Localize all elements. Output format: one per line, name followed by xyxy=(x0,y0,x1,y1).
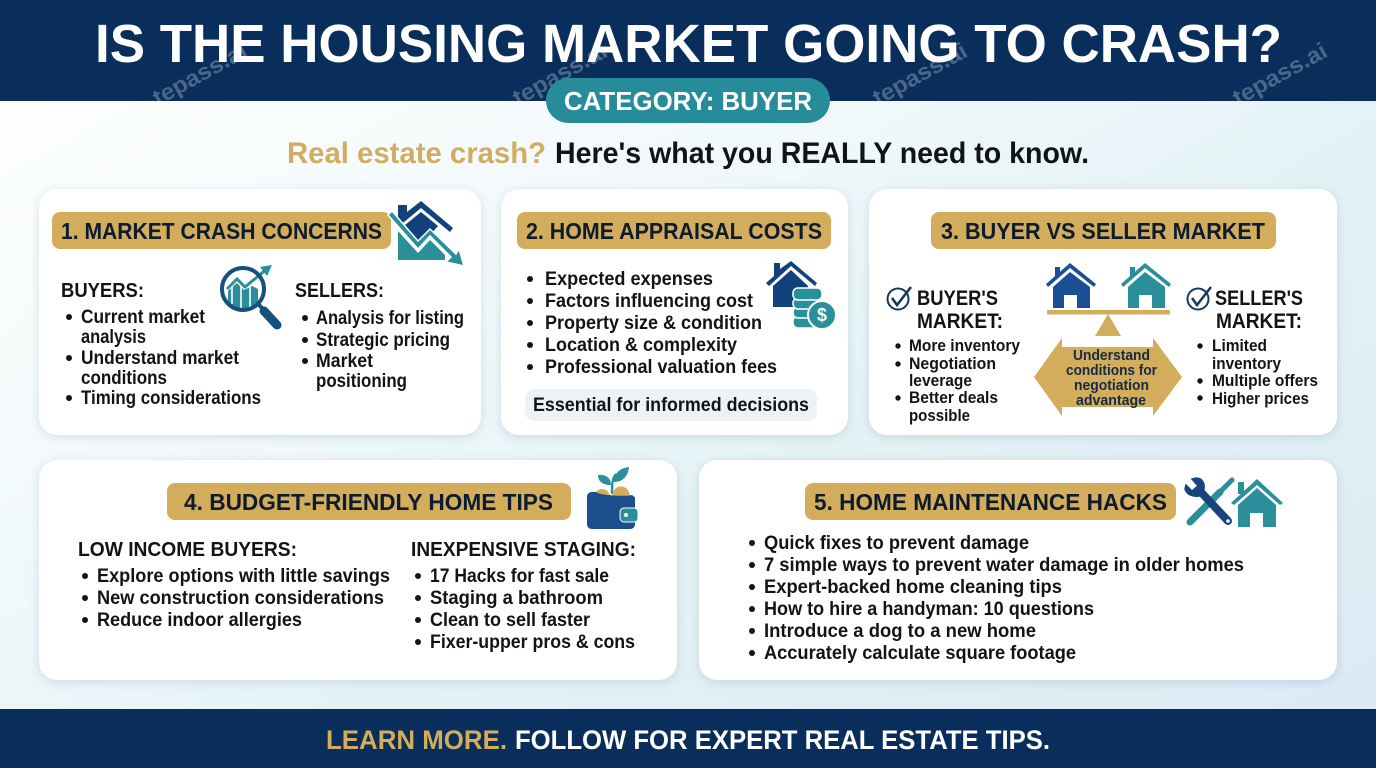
buyers list: BUYERS: xyxy=(61,280,144,302)
panel: home appraisal costs xyxy=(501,189,848,435)
callout: double arrow negotiation advantage: Understand xyxy=(1073,348,1150,364)
heading: home appraisal costs: 2. HOME APPRAISAL COSTS xyxy=(526,218,822,244)
appraisal list: Factors influencing cost xyxy=(545,291,754,312)
buyer's market list: MARKET: xyxy=(917,310,1003,333)
watermark xyxy=(152,42,1328,101)
buyer's market list: Better deals xyxy=(909,388,998,407)
callout: essential for informed decisions: Essential for informed decisions xyxy=(533,395,809,416)
appraisal list: Professional valuation fees xyxy=(545,357,777,378)
sellers list: SELLERS: xyxy=(295,280,384,302)
sellers list: Strategic pricing xyxy=(316,330,450,351)
subtitle xyxy=(287,137,1089,170)
icon: house with coins: $ xyxy=(817,305,827,325)
heading: home appraisal costs xyxy=(517,212,831,249)
inexpensive staging list: Clean to sell faster xyxy=(430,610,591,631)
inexpensive staging list: Fixer-upper pros & cons xyxy=(430,632,635,653)
low income buyers list: Reduce indoor allergies xyxy=(97,610,302,631)
heading: budget-friendly home tips: 4. BUDGET-FRIENDLY HOME TIPS xyxy=(184,489,553,515)
callout: double arrow negotiation advantage: advantage xyxy=(1076,393,1146,409)
sellers list: positioning xyxy=(316,371,407,392)
heading: budget-friendly home tips xyxy=(167,483,571,520)
icon: balance scale with two houses xyxy=(1046,263,1171,336)
heading: market crash concerns xyxy=(52,212,391,249)
heading: buyer vs seller market: 3. BUYER VS SELLER MARKET xyxy=(941,218,1266,244)
watermark: tepass.ai xyxy=(868,37,971,110)
heading: home maintenance hacks xyxy=(805,483,1176,520)
panel: budget-friendly home tips xyxy=(39,460,677,680)
panel: home maintenance hacks xyxy=(699,460,1337,680)
buyers list: Understand market xyxy=(81,348,240,369)
buyer's market list: More inventory xyxy=(909,336,1020,355)
heading: buyer vs seller market xyxy=(931,212,1276,249)
buyer's market list: Negotiation xyxy=(909,354,996,373)
watermark: tepass.ai xyxy=(148,37,251,110)
icon: tools and house xyxy=(1185,478,1283,527)
buyer's market list: leverage xyxy=(909,371,972,390)
low income buyers list: LOW INCOME BUYERS: xyxy=(78,539,297,561)
maintenance list xyxy=(749,533,1244,664)
buyers list: Timing considerations xyxy=(81,388,261,409)
appraisal list: Location & complexity xyxy=(545,335,737,356)
seller's market list: Multiple offers xyxy=(1212,371,1318,390)
maintenance list: Quick fixes to prevent damage xyxy=(764,533,1029,554)
callout: double arrow negotiation advantage xyxy=(1034,338,1182,416)
footer banner xyxy=(0,709,1376,768)
icon: house with coins xyxy=(766,261,836,329)
maintenance list: Accurately calculate square footage xyxy=(764,643,1076,664)
heading: home maintenance hacks: 5. HOME MAINTENANCE HACKS xyxy=(814,489,1167,515)
subtitle: Real estate crash? xyxy=(287,137,546,170)
appraisal list xyxy=(527,269,777,378)
heading: market crash concerns: 1. MARKET CRASH CONCERNS xyxy=(61,218,382,244)
subtitle: Here's what you REALLY need to know. xyxy=(555,137,1089,170)
appraisal list: Expected expenses xyxy=(545,269,713,290)
low income buyers list: Explore options with little savings xyxy=(97,566,390,587)
footer banner: LEARN MORE. xyxy=(326,725,507,755)
maintenance list: Introduce a dog to a new home xyxy=(764,621,1036,642)
watermark: tepass.ai xyxy=(508,37,611,110)
seller's market list: SELLER'S xyxy=(1215,287,1303,310)
maintenance list: 7 simple ways to prevent water damage in older homes xyxy=(764,555,1244,576)
inexpensive staging list: Staging a bathroom xyxy=(430,588,603,609)
callout: essential for informed decisions xyxy=(525,389,817,421)
seller's market list: MARKET: xyxy=(1216,310,1302,333)
title banner xyxy=(0,0,1376,101)
icon: wallet with sprout xyxy=(587,467,638,529)
panel: market crash concerns xyxy=(39,189,481,435)
appraisal list: Property size & condition xyxy=(545,313,762,334)
seller's market list: Limited xyxy=(1212,336,1267,355)
inexpensive staging list: INEXPENSIVE STAGING: xyxy=(411,539,636,561)
maintenance list: Expert-backed home cleaning tips xyxy=(764,577,1062,598)
icon: check seller xyxy=(1188,287,1211,310)
buyer's market list xyxy=(895,287,1020,425)
watermark: tepass.ai xyxy=(1228,37,1331,110)
buyers list xyxy=(61,280,261,409)
category badge xyxy=(546,78,830,123)
callout: double arrow negotiation advantage: conditions for xyxy=(1066,363,1157,379)
buyers list: analysis xyxy=(81,327,146,348)
footer banner: FOLLOW FOR EXPERT REAL ESTATE TIPS. xyxy=(515,725,1050,755)
sellers list: Analysis for listing xyxy=(316,308,464,329)
buyer's market list: possible xyxy=(909,406,970,425)
low income buyers list: New construction considerations xyxy=(97,588,384,609)
maintenance list: How to hire a handyman: 10 questions xyxy=(764,599,1094,620)
inexpensive staging list: 17 Hacks for fast sale xyxy=(430,566,609,587)
seller's market list: inventory xyxy=(1212,354,1281,373)
sellers list xyxy=(295,280,464,392)
low income buyers list xyxy=(78,539,390,631)
seller's market list: Higher prices xyxy=(1212,389,1309,408)
title banner: IS THE HOUSING MARKET GOING TO CRASH? xyxy=(95,14,1282,74)
category badge: CATEGORY: BUYER xyxy=(564,86,812,116)
seller's market list xyxy=(1197,287,1318,408)
icon: house with falling arrow xyxy=(388,201,464,266)
icon: magnifier with chart xyxy=(222,265,277,325)
buyers list: conditions xyxy=(81,368,167,389)
sellers list: Market xyxy=(316,351,374,372)
inexpensive staging list xyxy=(411,539,636,653)
buyer's market list: BUYER'S xyxy=(917,287,998,310)
icon: check buyer xyxy=(888,287,911,310)
buyers list: Current market xyxy=(81,307,206,328)
callout: double arrow negotiation advantage: negotiation xyxy=(1074,378,1149,394)
panel: buyer vs seller market xyxy=(869,189,1337,435)
